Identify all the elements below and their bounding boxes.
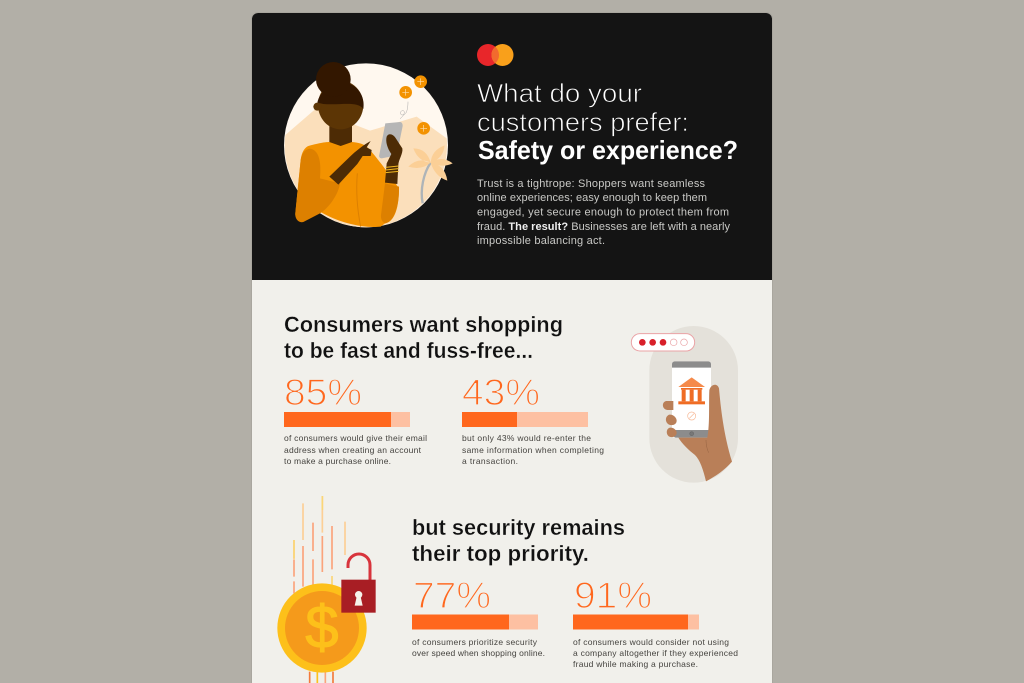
stat: 77%: [412, 575, 545, 658]
stat: 43%: same information when completing: [462, 445, 604, 455]
stat: 85%: of consumers would give their email: [284, 433, 427, 443]
stat: 85%: address when creating an account: [284, 445, 422, 455]
panel: infographic card: [252, 13, 772, 683]
stat: 91%: a company altogether if they experienced: [573, 648, 738, 658]
title: [477, 78, 738, 165]
stat: 91%: fraud while making a purchase.: [573, 659, 698, 669]
heading: fast and fuss-free: to be fast and fuss-free...: [284, 338, 533, 363]
title: customers prefer:: [477, 107, 689, 137]
stat: 77%: 77%: [413, 575, 491, 616]
stat: 91%: [573, 575, 738, 669]
stat: 85%: to make a purchase online.: [284, 456, 391, 466]
intro text: online experiences; easy enough to keep them: [477, 192, 707, 204]
stat: 43%: 43%: [462, 372, 540, 413]
heading: fast and fuss-free: Consumers want shopping: [284, 312, 563, 337]
stat: 91%: of consumers would consider not using: [573, 637, 729, 647]
stat: 43%: [462, 372, 604, 466]
illustration: hand holding phone with PIN: [631, 326, 738, 483]
intro text: Trust is a tightrope: Shoppers want seamless: [477, 178, 706, 190]
stat: 77%: of consumers prioritize security: [412, 637, 538, 647]
logo: overlapping circles: [477, 44, 514, 66]
stat: 77%: over speed when shopping online.: [412, 648, 545, 658]
stat: 91%: 91%: [574, 575, 652, 616]
illustration: coin with padlock: [277, 496, 376, 683]
intro text: [477, 178, 730, 247]
stat: 43%: but only 43% would re-enter the: [462, 433, 591, 443]
title: Safety or experience?: [478, 135, 738, 165]
heading: fast and fuss-free: [284, 312, 563, 363]
illustration: woman using phone: [284, 62, 453, 227]
illustration: coin with padlock: $: [305, 594, 339, 661]
title: What do your: [477, 78, 642, 108]
intro text: impossible balancing act.: [477, 235, 605, 247]
intro text: fraud. The result? Businesses are left with a nearly: [477, 221, 730, 233]
heading: security priority: but security remains: [412, 515, 625, 540]
stat: 43%: a transaction.: [462, 456, 518, 466]
panel: dark header: [252, 13, 772, 280]
stat: 85%: 85%: [284, 372, 362, 413]
heading: security priority: their top priority.: [412, 541, 589, 566]
heading: security priority: [412, 515, 625, 566]
intro text: engaged, yet secure enough to protect them from: [477, 206, 729, 218]
stat: 85%: [284, 372, 427, 466]
